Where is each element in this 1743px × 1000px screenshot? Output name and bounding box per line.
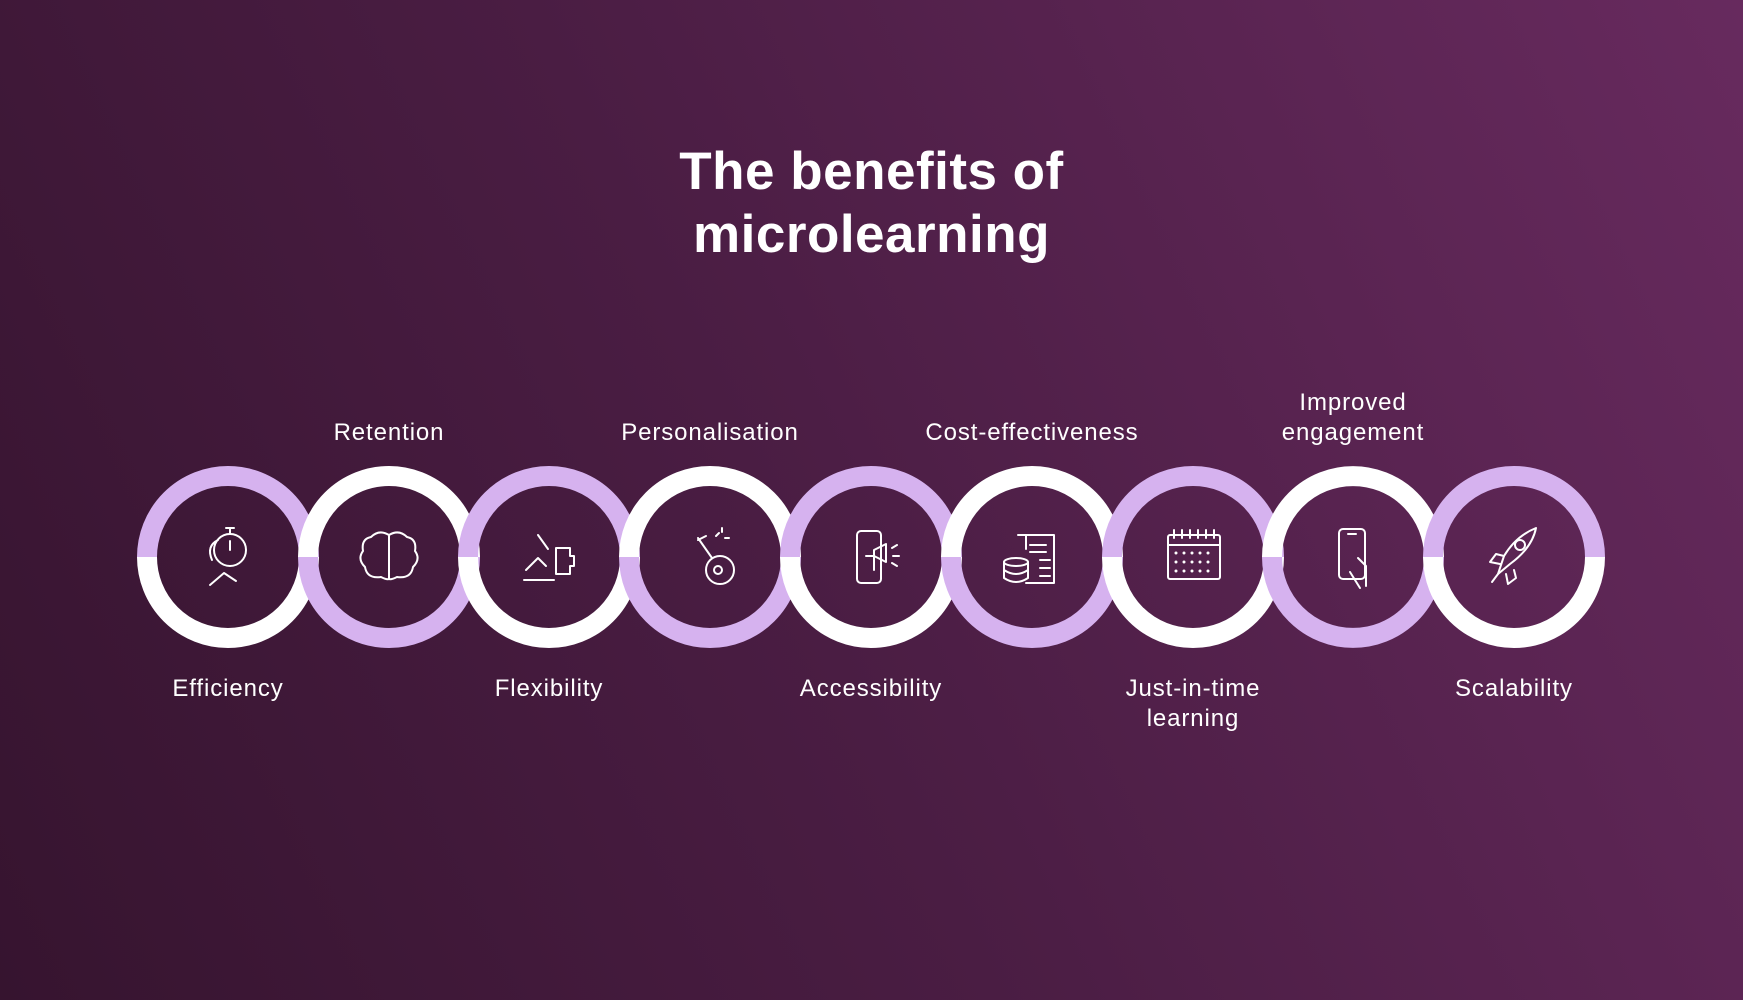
icon: phone hand xyxy=(1339,529,1366,588)
icon: calendar xyxy=(1168,530,1220,579)
label: Accessibility: Accessibility xyxy=(800,675,942,702)
label: Cost-effectiveness: Cost-effectiveness xyxy=(925,419,1139,446)
icon: brain xyxy=(360,532,418,579)
label: Just-in-time learning xyxy=(1126,675,1260,732)
icon: flask xyxy=(698,528,734,584)
label: Personalisation: Personalisation xyxy=(621,419,799,446)
title xyxy=(679,142,1064,264)
icon: hand puzzle xyxy=(524,535,574,580)
icon: rocket xyxy=(1490,528,1536,584)
title: The benefits of xyxy=(679,142,1064,201)
label: Improved engagement: engagement xyxy=(1282,419,1424,446)
icon: coins document xyxy=(1004,535,1054,583)
label: Scalability: Scalability xyxy=(1455,675,1573,702)
title: microlearning xyxy=(693,205,1050,264)
label: Flexibility: Flexibility xyxy=(495,675,603,702)
label: Efficiency: Efficiency xyxy=(172,675,284,702)
label: Just-in-time learning: Just-in-time xyxy=(1126,675,1260,702)
icon: phone megaphone xyxy=(857,531,899,583)
label: Just-in-time learning: learning xyxy=(1147,705,1239,732)
label: Improved engagement xyxy=(1282,389,1424,446)
icon: stopwatch xyxy=(210,528,246,585)
label: Improved engagement: Improved xyxy=(1299,389,1407,416)
label: Retention: Retention xyxy=(334,419,444,446)
